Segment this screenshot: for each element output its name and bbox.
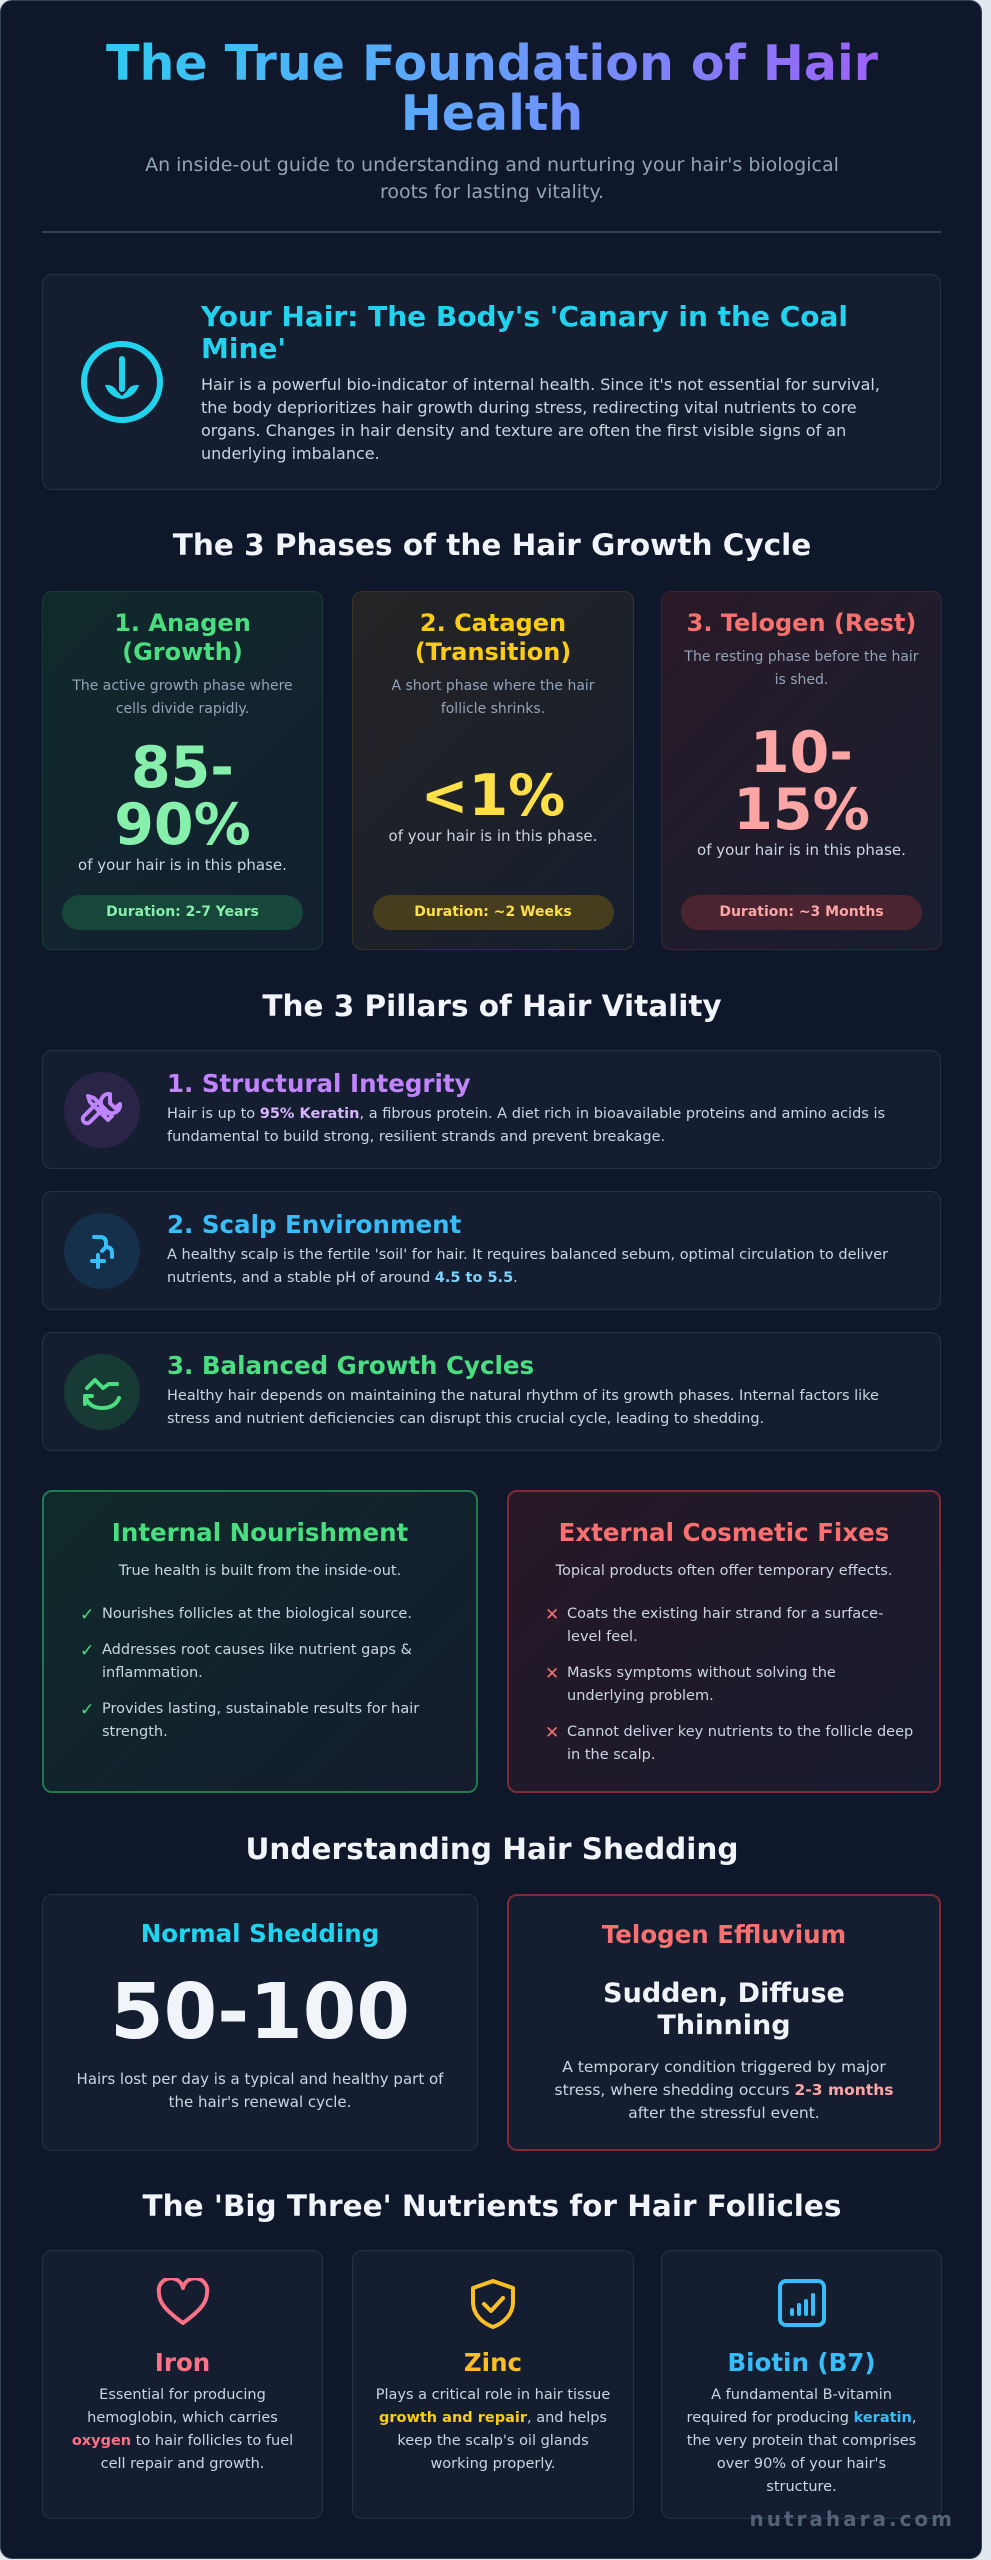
pill: catagen duration: Duration: ~2 Weeks xyxy=(414,904,572,920)
panel: anagen: 85- xyxy=(131,734,234,800)
panel: telogen effluvium: Sudden, Diffuse xyxy=(603,1978,845,2009)
panel: biotin xyxy=(661,2250,942,2519)
panel: structural integrity xyxy=(42,1050,941,1169)
panel: anagen: of your hair is in this phase. xyxy=(78,856,287,874)
icon: cycle arrows xyxy=(64,1354,140,1430)
pill: anagen duration: Duration: 2-7 Years xyxy=(106,904,259,920)
heading: Your Hair: The Body's 'Canary in the Coal Mine' xyxy=(201,300,848,365)
panel: normal shedding: Normal Shedding xyxy=(141,1919,379,1948)
watermark: nutrahara.com xyxy=(749,2507,955,2531)
heading: nutrients: The 'Big Three' Nutrients for Hair Follicles xyxy=(143,2189,841,2223)
panel: structural integrity: Hair is up to 95% Keratin, a fibrous protein. A diet rich in bioavailable proteins and amino acids is fundamental to build strong, resilient strands and prevent breakage. xyxy=(167,1106,885,1145)
panel: internal nourishment: Nourishes follicles at the biological source. xyxy=(102,1606,412,1622)
icon: scalp xyxy=(64,1213,140,1289)
body text: Hair is a powerful bio-indicator of internal health. Since it's not essential for survival, the body deprioritizes hair growth during stress, redirecting vital nutrients to core organs. Changes in hair density and texture are often the first visible signs of an underlying imbalance. xyxy=(201,375,880,463)
panel: catagen: of your hair is in this phase. xyxy=(389,827,597,845)
panel: catagen: A short phase where the hair follicle shrinks. xyxy=(391,678,595,717)
panel: telogen: The resting phase before the hair is shed. xyxy=(684,649,919,688)
panel: telogen effluvium: Telogen Effluvium xyxy=(602,1920,846,1949)
panel: anagen: 1. Anagen (Growth) xyxy=(114,609,251,666)
panel: telogen: 15% xyxy=(733,777,870,843)
panel: internal nourishment xyxy=(42,1490,478,1793)
panel: external fixes: Masks symptoms without solving the underlying problem. xyxy=(567,1665,836,1704)
panel: zinc: Zinc xyxy=(464,2348,522,2377)
panel: internal nourishment: ✓ xyxy=(80,1700,94,1720)
icon: heart xyxy=(156,2278,210,2325)
panel: normal shedding xyxy=(42,1894,478,2151)
title: The True Foundation of Hair Health xyxy=(106,35,878,142)
panel: external fixes: ✕ xyxy=(545,1723,559,1743)
panel: balanced growth cycles: 3. Balanced Growth Cycles xyxy=(167,1351,534,1380)
panel: iron xyxy=(42,2250,323,2519)
panel: scalp environment xyxy=(42,1191,941,1310)
panel: biotin: Biotin (B7) xyxy=(727,2348,876,2377)
panel: canary intro xyxy=(42,274,941,490)
panel: external fixes xyxy=(507,1490,941,1793)
panel: zinc xyxy=(352,2250,634,2519)
panel: telogen effluvium xyxy=(507,1894,941,2151)
icon: tools xyxy=(64,1072,140,1148)
panel: catagen: <1% xyxy=(421,763,565,829)
panel: external fixes: ✕ xyxy=(545,1605,559,1625)
pill: anagen duration xyxy=(62,895,303,930)
pill: catagen duration xyxy=(372,895,614,930)
panel: catagen: 2. Catagen (Transition) xyxy=(415,609,571,666)
pill: telogen duration: Duration: ~3 Months xyxy=(719,904,884,920)
panel: internal nourishment: Internal Nourishment xyxy=(112,1518,408,1547)
panel: internal nourishment: Provides lasting, sustainable results for hair strength. xyxy=(102,1701,419,1740)
panel: anagen: 90% xyxy=(114,792,251,858)
panel: telogen effluvium: Thinning xyxy=(657,2010,791,2041)
panel: scalp environment: 2. Scalp Environment xyxy=(167,1210,461,1239)
panel: normal shedding: Hairs lost per day is a typical and healthy part of the hair's renewal cycle. xyxy=(77,2070,443,2111)
heading: phases: The 3 Phases of the Hair Growth Cycle xyxy=(173,528,811,562)
heading: pillars: The 3 Pillars of Hair Vitality xyxy=(262,989,722,1023)
panel: biotin: A fundamental B-vitamin required for producing keratin, the very protein that comprises over 90% of your hair's structure. xyxy=(687,2387,916,2495)
panel: telogen xyxy=(661,591,942,950)
heading: shedding: Understanding Hair Shedding xyxy=(245,1832,739,1866)
icon: shield check xyxy=(471,2279,515,2329)
subtitle: An inside-out guide to understanding and nurturing your hair's biological roots for lasting vitality. xyxy=(145,154,839,203)
panel: iron: Iron xyxy=(155,2348,210,2377)
panel: anagen: The active growth phase where cells divide rapidly. xyxy=(72,678,293,717)
panel: external fixes: Topical products often offer temporary effects. xyxy=(556,1563,892,1579)
icon: download circle xyxy=(81,341,163,423)
panel: internal nourishment: Addresses root causes like nutrient gaps & inflammation. xyxy=(102,1642,412,1681)
panel: normal shedding: 50-100 xyxy=(110,1968,410,2057)
panel: catagen xyxy=(352,591,634,950)
panel: external fixes: Coats the existing hair strand for a surface-level feel. xyxy=(567,1606,883,1645)
panel: external fixes: ✕ xyxy=(545,1664,559,1684)
panel: internal nourishment: ✓ xyxy=(80,1605,94,1625)
pill: telogen duration xyxy=(681,895,922,930)
panel: telogen: of your hair is in this phase. xyxy=(697,841,906,859)
panel: telogen effluvium: A temporary condition triggered by major stress, where shedding occurs 2-3 months after the stressful event. xyxy=(555,2058,893,2122)
icon: chart box xyxy=(778,2279,826,2327)
panel: structural integrity: 1. Structural Integrity xyxy=(167,1069,471,1098)
panel: telogen: 3. Telogen (Rest) xyxy=(687,609,916,637)
panel: internal nourishment: ✓ xyxy=(80,1641,94,1661)
panel: scalp environment: A healthy scalp is the fertile 'soil' for hair. It requires balanced sebum, optimal circulation to deliver nutrients, and a stable pH of around 4.5 to 5.5. xyxy=(167,1247,888,1286)
panel: iron: Essential for producing hemoglobin, which carries oxygen to hair follicles to fuel cell repair and growth. xyxy=(72,2387,293,2472)
panel: external fixes: Cannot deliver key nutrients to the follicle deep in the scalp. xyxy=(567,1724,913,1763)
panel: balanced growth cycles: Healthy hair depends on maintaining the natural rhythm of its growth phases. Internal factors like stress and nutrient deficiencies can disrupt this crucial cycle, leading to shedding. xyxy=(167,1388,879,1427)
panel: zinc: Plays a critical role in hair tissue growth and repair, and helps keep the scalp's oil glands working properly. xyxy=(376,2387,610,2472)
panel: internal nourishment: True health is built from the inside-out. xyxy=(119,1563,401,1579)
panel: balanced growth cycles xyxy=(42,1332,941,1451)
panel: telogen: 10- xyxy=(750,720,853,786)
panel: external fixes: External Cosmetic Fixes xyxy=(559,1518,889,1547)
panel: anagen xyxy=(42,591,323,950)
